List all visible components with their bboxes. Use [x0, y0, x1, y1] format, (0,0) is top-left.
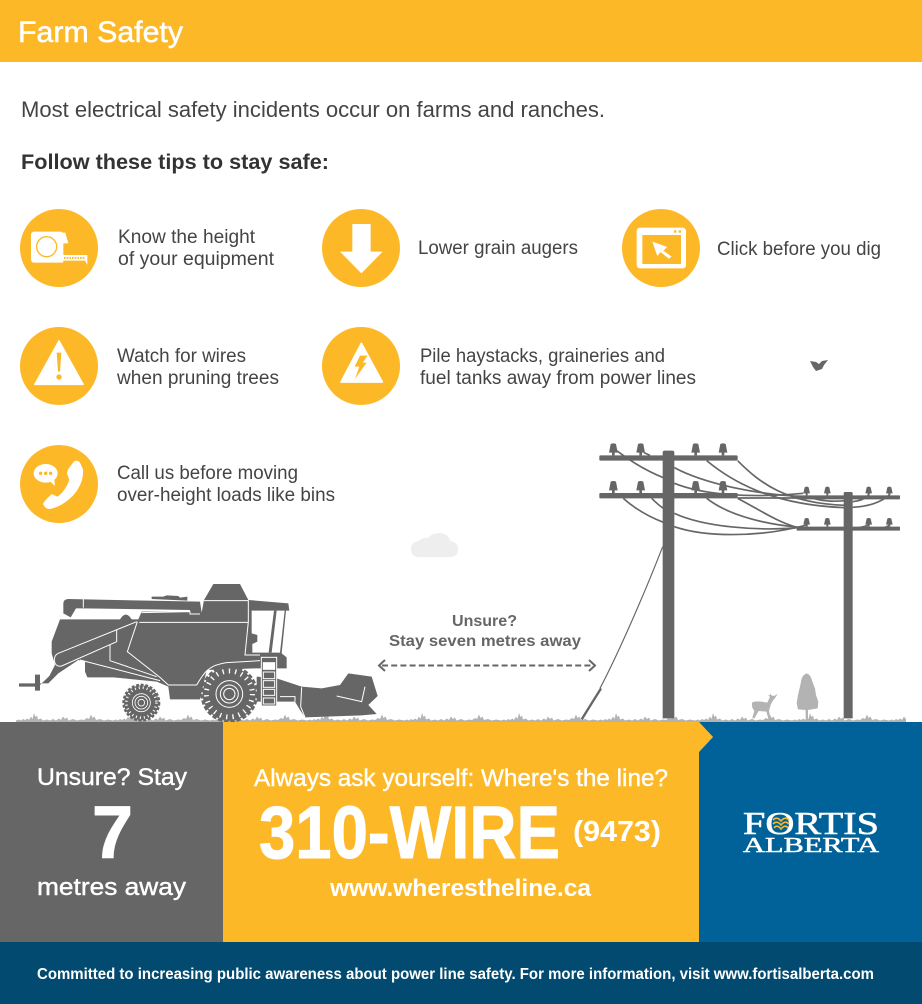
panel: seven metres: [0, 722, 223, 942]
rear wheel: [123, 685, 159, 721]
wires: [617, 451, 889, 535]
panel text: 310-WIRE: [259, 791, 560, 874]
icon: high voltage triangle: [322, 327, 400, 405]
arrow: distance: [379, 660, 595, 671]
guy wire: [600, 547, 663, 688]
icon: warning triangle: [20, 327, 98, 405]
tip text: Lower grain augers: [418, 238, 578, 259]
harvester body: [19, 584, 289, 699]
panel: phone number: [223, 722, 713, 942]
title: Farm Safety: [18, 16, 183, 49]
tip text: Call us before moving: [117, 463, 298, 484]
tips heading: Follow these tips to stay safe:: [21, 151, 329, 174]
body outlines: [54, 599, 365, 717]
tip text: over-height loads like bins: [117, 485, 335, 506]
callout text: Stay seven metres away: [389, 633, 581, 650]
panel text: Unsure? Stay: [37, 764, 187, 791]
tip text: Click before you dig: [717, 239, 881, 260]
icon: tape measure: [20, 209, 98, 287]
front wheel: [202, 666, 257, 722]
icon: browser cursor: [622, 209, 700, 287]
panel text: metres away: [37, 874, 186, 901]
ladder: [261, 657, 277, 706]
tip text: [117, 463, 335, 506]
tip: call us: [20, 445, 335, 523]
panel text: (9473): [573, 816, 661, 848]
ground grass strip: [16, 708, 906, 722]
tip text: Watch for wires: [117, 346, 246, 367]
tip text: [118, 227, 275, 270]
power lines: [582, 443, 900, 719]
icon: deer: [752, 694, 778, 718]
panel text: Always ask yourself: Where's the line?: [254, 765, 668, 792]
callout: seven metres: [379, 613, 595, 671]
logo: FortisAlberta: FORTIS: [743, 805, 879, 841]
tip: pile haystacks: [322, 327, 696, 405]
tip: click before you dig: [622, 209, 881, 287]
tip text: Pile haystacks, graineries and: [420, 346, 665, 367]
combine harvester: [19, 584, 378, 722]
panel text: 7: [92, 791, 133, 874]
callout text: [389, 613, 581, 650]
icon: cloud: [411, 533, 458, 557]
logo: FortisAlberta: ALBERTA: [743, 833, 880, 857]
tip: know the height: [20, 209, 275, 287]
icon: tree: [797, 673, 818, 718]
footer: [0, 942, 922, 1004]
tip text: [116, 346, 279, 389]
intro sentence: Most electrical safety incidents occur on farms and ranches.: [21, 97, 605, 122]
cab window: [252, 611, 285, 653]
panel text: www.wherestheline.ca: [329, 875, 592, 902]
tip text: when pruning trees: [116, 368, 279, 389]
header reel: [257, 673, 378, 717]
icon: phone with speech bubble: [20, 445, 98, 523]
icon: bird: [810, 360, 828, 371]
panel text: [37, 764, 187, 901]
panel: logo: [699, 722, 922, 942]
callout text: Unsure?: [452, 613, 517, 630]
icon: down arrow: [322, 209, 400, 287]
tip text: of your equipment: [118, 249, 275, 270]
tip: watch for wires: [20, 327, 279, 405]
footer text: Committed to increasing public awareness about power line safety. For more information, visit www.fortisalberta.com: [37, 966, 874, 983]
logo: FortisAlberta: [743, 805, 880, 857]
near pole: [599, 443, 738, 718]
panel text: [254, 765, 668, 902]
tip text: Know the height: [118, 227, 256, 248]
grain tank bump: [152, 595, 187, 601]
far pole: [797, 487, 900, 718]
header bar: [0, 0, 922, 62]
tip text: [420, 346, 696, 389]
tip text: fuel tanks away from power lines: [420, 368, 696, 389]
tip: lower grain augers: [322, 209, 578, 287]
